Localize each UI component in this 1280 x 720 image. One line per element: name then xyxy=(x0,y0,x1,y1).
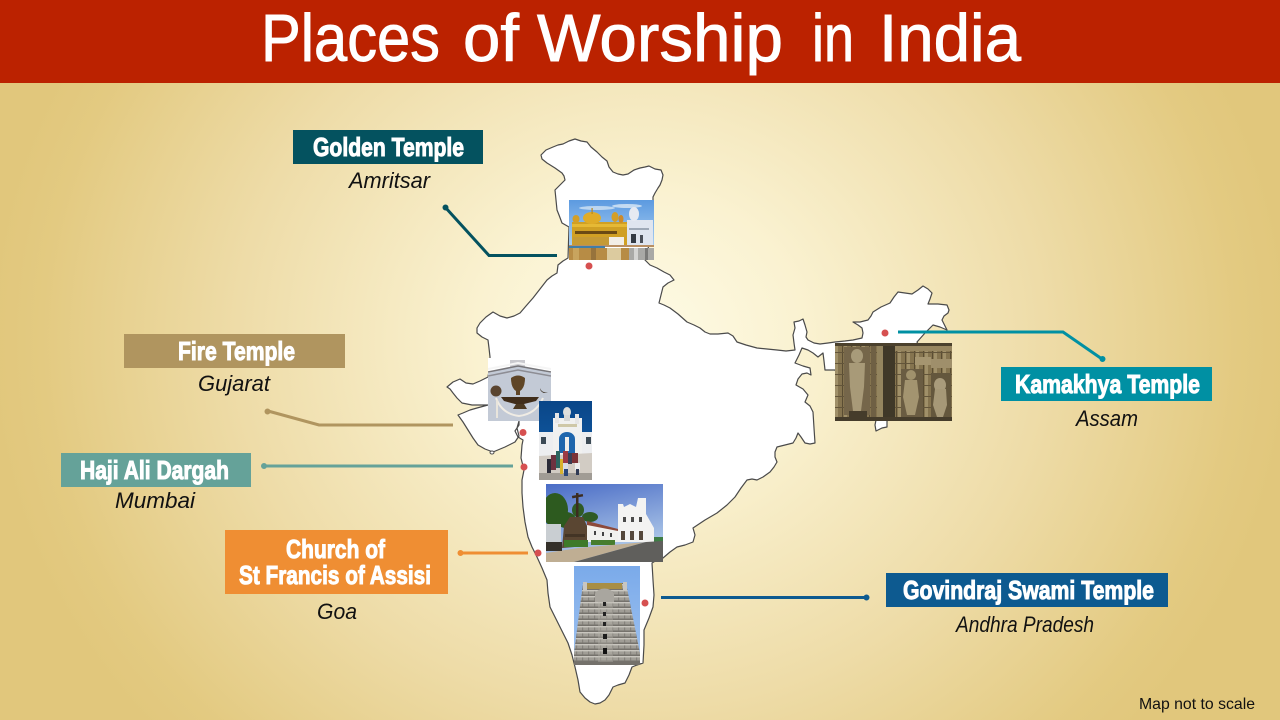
leader: Fire Temple xyxy=(265,409,453,425)
label: Govindraj Swami Temple xyxy=(886,573,1168,637)
photo: Golden Temple xyxy=(569,200,654,260)
label: Church of St Francis of Assisi: Goa xyxy=(317,599,357,624)
leader: Haji Ali Dargah xyxy=(262,464,513,468)
title: in xyxy=(812,1,854,76)
small island on Gujarat coast xyxy=(490,451,494,454)
label: Golden Temple: Amritsar xyxy=(347,168,432,193)
label: Church of St Francis of Assisi: Church of xyxy=(286,534,385,564)
label: Fire Temple: Gujarat xyxy=(198,371,271,396)
site marker dots xyxy=(520,262,888,606)
photo: Kamakhya Temple xyxy=(835,343,952,421)
leader: Govindraj Swami Temple xyxy=(661,595,869,600)
label: Govindraj Swami Temple: Govindraj Swami Temple xyxy=(903,575,1154,605)
title: of xyxy=(463,1,519,76)
photo: Church of St Francis of Assisi xyxy=(542,484,663,562)
label: Haji Ali Dargah: Mumbai xyxy=(115,488,196,513)
label: Kamakhya Temple: Assam xyxy=(1074,406,1138,431)
title xyxy=(261,1,1022,76)
label: Fire Temple xyxy=(124,334,345,396)
label: Fire Temple: Fire Temple xyxy=(178,336,295,366)
leader: Church of St Francis xyxy=(458,550,528,556)
label: Kamakhya Temple xyxy=(1001,367,1212,431)
label: Haji Ali Dargah xyxy=(61,453,251,513)
label: Church of St Francis of Assisi: St Francis of Assisi xyxy=(239,560,431,590)
note: map not to scale: Map not to scale xyxy=(1139,696,1255,713)
label: Haji Ali Dargah: Haji Ali Dargah xyxy=(80,455,229,485)
title banner xyxy=(0,0,1280,83)
label: Govindraj Swami Temple: Andhra Pradesh xyxy=(954,612,1094,637)
label: Golden Temple xyxy=(293,130,483,193)
label: Church of St Francis of Assisi xyxy=(225,530,448,624)
label: Kamakhya Temple: Kamakhya Temple xyxy=(1015,369,1200,399)
leader: Golden Temple xyxy=(443,205,557,256)
photo: Fire Temple xyxy=(488,358,551,421)
title: Worship xyxy=(537,1,783,76)
title: Places xyxy=(261,1,440,76)
leader: Kamakhya Temple xyxy=(898,332,1105,362)
photo: Haji Ali Dargah xyxy=(539,401,592,480)
label: Golden Temple: Golden Temple xyxy=(313,132,464,162)
map of India xyxy=(447,139,949,704)
photo: Govindraj Swami Temple xyxy=(574,566,640,665)
title: India xyxy=(879,1,1022,76)
